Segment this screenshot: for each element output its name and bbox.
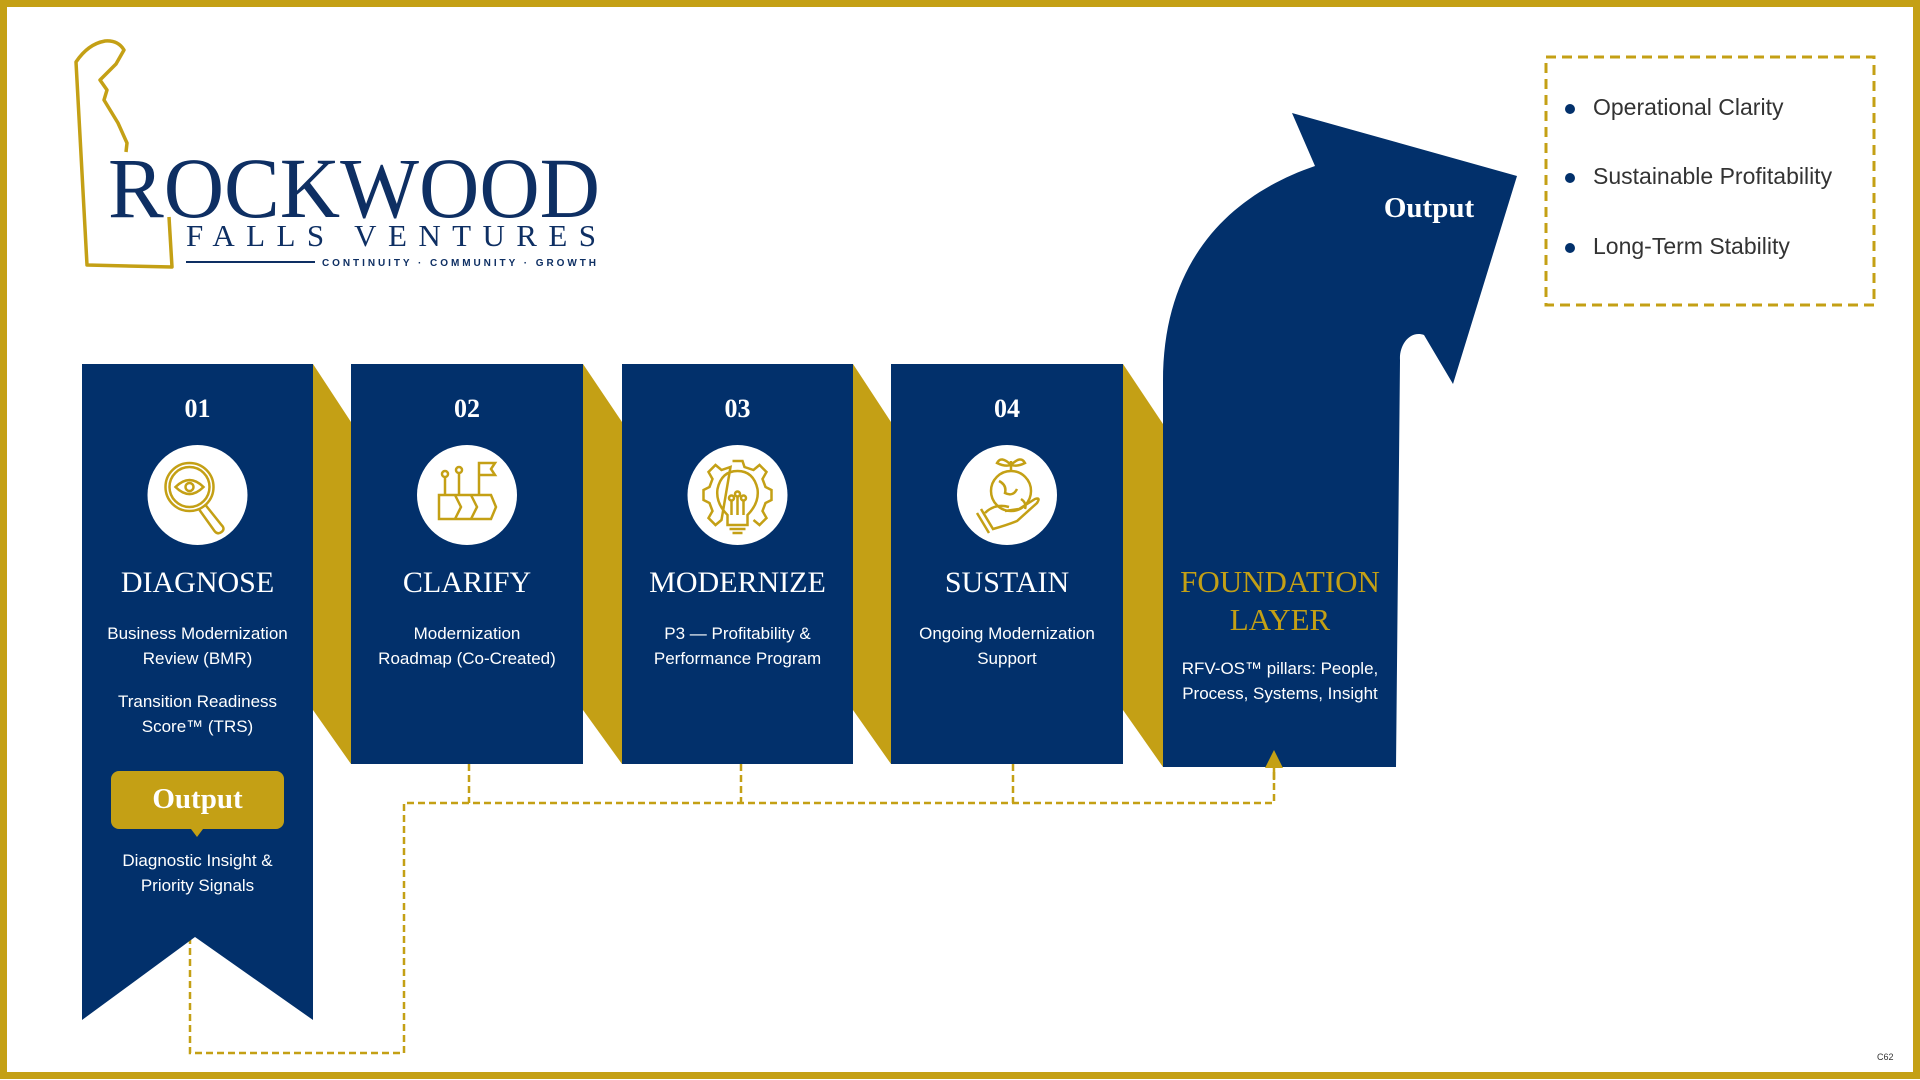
- logo wordmark: ROCKWOOD: [108, 140, 600, 236]
- panel: 03 modernize: Performance Program: [654, 649, 821, 668]
- panel: 01 diagnose: 01: [184, 394, 210, 423]
- panel: 04 sustain: Ongoing Modernization: [919, 624, 1095, 643]
- icon: gear bulb: [704, 461, 772, 533]
- panel: 03 modernize: [622, 364, 853, 764]
- panel: 01 diagnose: DIAGNOSE: [121, 566, 274, 599]
- panel: 04 sustain: SUSTAIN: [945, 566, 1069, 599]
- callout: output badge: [111, 771, 284, 837]
- arrow: foundation layer to output: RFV-OS™ pillars: People,: [1182, 659, 1378, 678]
- panel: 04 sustain: 04: [994, 394, 1020, 423]
- panel: 03 modernize: P3 — Profitability &: [664, 624, 811, 643]
- panel: outcomes box: [1546, 57, 1874, 305]
- logo: Rockwood Falls Ventures: [76, 41, 600, 269]
- slide code: C62: [1877, 1052, 1894, 1062]
- panel: 02 clarify: 02: [454, 394, 480, 423]
- arrow: foundation layer to output: Output: [1384, 192, 1474, 224]
- icon: hand holding globe: [977, 459, 1039, 533]
- panel: 01 diagnose: Score™ (TRS): [142, 717, 253, 736]
- dashed feedback line: [190, 764, 1274, 1053]
- logo tagline: CONTINUITY · COMMUNITY · GROWTH: [322, 258, 596, 269]
- icon: state outline: [76, 41, 172, 267]
- panel: 01 diagnose: [82, 364, 313, 1020]
- panel: 02 clarify: Roadmap (Co-Created): [378, 649, 556, 668]
- panel: 04 sustain: Support: [977, 649, 1037, 668]
- panel: 02 clarify: [351, 364, 583, 764]
- arrow: foundation layer to output: LAYER: [1230, 602, 1331, 637]
- panel: outcomes box: Operational Clarity: [1593, 94, 1784, 120]
- panel: 01 diagnose: Transition Readiness: [118, 692, 277, 711]
- icon: roadmap flag: [439, 463, 496, 519]
- panel: outcomes box: Long-Term Stability: [1593, 233, 1790, 259]
- panel: 01 diagnose: Priority Signals: [141, 876, 254, 895]
- arrow: foundation layer to output: Process, Systems, Insight: [1182, 684, 1378, 703]
- panel: 01 diagnose: Diagnostic Insight &: [122, 851, 273, 870]
- callout: output badge: Output: [152, 783, 243, 815]
- arrow: foundation layer to output: FOUNDATION: [1180, 564, 1380, 599]
- icon: magnifier with eye: [166, 463, 224, 533]
- panel: 02 clarify: CLARIFY: [403, 566, 531, 599]
- panel: 04 sustain: [891, 364, 1123, 764]
- panel: 01 diagnose: Business Modernization: [107, 624, 288, 643]
- connectors: gold parallelograms: [313, 364, 1163, 767]
- panel: 03 modernize: MODERNIZE: [649, 566, 826, 599]
- logo subtitle: FALLS VENTURES: [186, 218, 596, 253]
- panel: 03 modernize: 03: [724, 394, 750, 423]
- panel: outcomes box: Sustainable Profitability: [1593, 163, 1833, 189]
- panel: 01 diagnose: Review (BMR): [143, 649, 252, 668]
- arrow: foundation layer to output: [1163, 113, 1517, 767]
- panel: 02 clarify: Modernization: [414, 624, 520, 643]
- arrow: dashed line head into foundation: [1265, 750, 1283, 780]
